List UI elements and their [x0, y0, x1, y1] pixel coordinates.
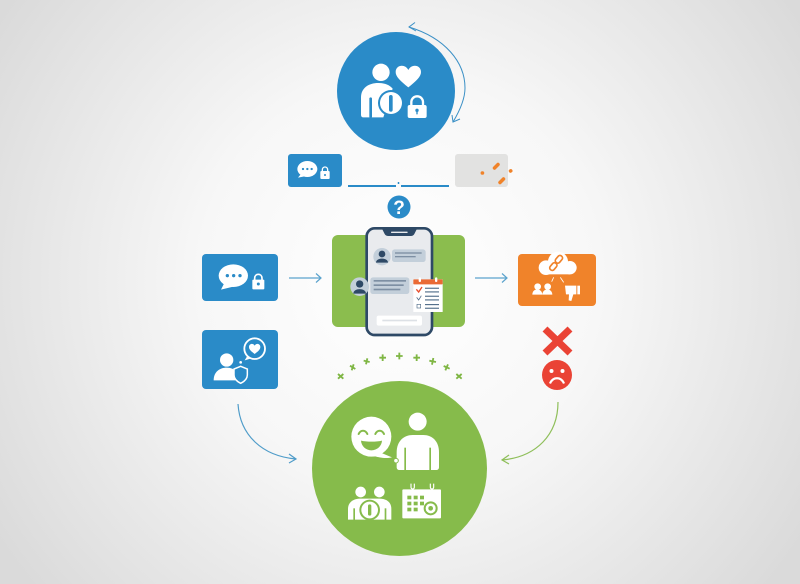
arrow: phone to orange box	[475, 274, 507, 282]
phone with chat	[350, 228, 443, 335]
arrow: circular arc around top circle	[409, 22, 465, 122]
arrow: blue box to green circle	[238, 404, 296, 463]
icon: question mark	[388, 196, 410, 219]
large green circle: healthy communication	[312, 381, 487, 556]
arrow: sad face to green circle	[502, 402, 558, 464]
chat row two	[350, 277, 409, 296]
icon: smiling speech bubble	[351, 417, 392, 458]
chat row one	[373, 248, 426, 265]
top blue circle: relationship privacy	[337, 32, 455, 150]
icon: question mark: ?	[393, 198, 405, 219]
arrow: left box to phone	[289, 274, 321, 282]
grey box: broken connection	[455, 154, 511, 187]
blue box: person, shield and heart	[202, 330, 278, 389]
blue box: chat with lock	[202, 254, 278, 301]
orange box: broken link, group, thumbs down	[518, 252, 596, 306]
icon: sad face	[542, 360, 572, 390]
icon: calendar with clock	[402, 484, 441, 518]
icon: red cross	[545, 329, 570, 353]
icon: two people with coin	[348, 487, 391, 520]
small blue box: chat with lock	[288, 154, 342, 187]
icon: person	[394, 413, 439, 470]
icon: person with heart and lock	[361, 64, 427, 118]
connector lines	[348, 182, 449, 186]
arc of green plus marks	[338, 353, 462, 379]
green panel behind phone	[332, 235, 465, 327]
input bar	[377, 316, 422, 326]
calendar checklist	[413, 277, 443, 312]
